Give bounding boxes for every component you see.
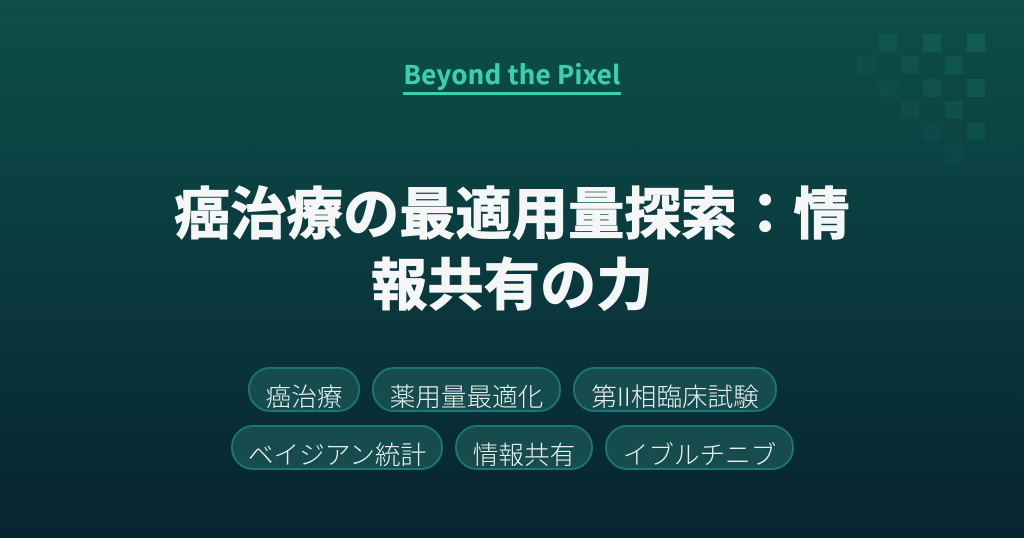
tag: ベイジアン統計: ベイジアン統計 [248, 435, 426, 472]
title [174, 170, 850, 322]
tag group [231, 367, 794, 472]
title: 報共有の力 [371, 240, 653, 322]
tag: 情報共有: 情報共有 [473, 435, 575, 472]
tag: 薬用量最適化: 薬用量最適化 [390, 377, 543, 414]
tag: 第II相臨床試験: 第II相臨床試験 [591, 377, 759, 414]
tag: 第II相臨床試験 [573, 367, 777, 412]
tag: 情報共有 [455, 425, 593, 470]
decorative pixel grid [879, 34, 985, 141]
title: 癌治療の最適用量探索：情 [174, 170, 850, 250]
tag: 癌治療 [248, 367, 360, 412]
tag: イブルチニブ: イブルチニブ [623, 435, 776, 472]
brand label: Beyond the Pixel: Beyond the Pixel [403, 55, 621, 92]
tag: 薬用量最適化 [372, 367, 561, 412]
tag: 癌治療: 癌治療 [266, 377, 342, 414]
tag: イブルチニブ [605, 425, 794, 470]
tag: ベイジアン統計 [231, 425, 443, 470]
